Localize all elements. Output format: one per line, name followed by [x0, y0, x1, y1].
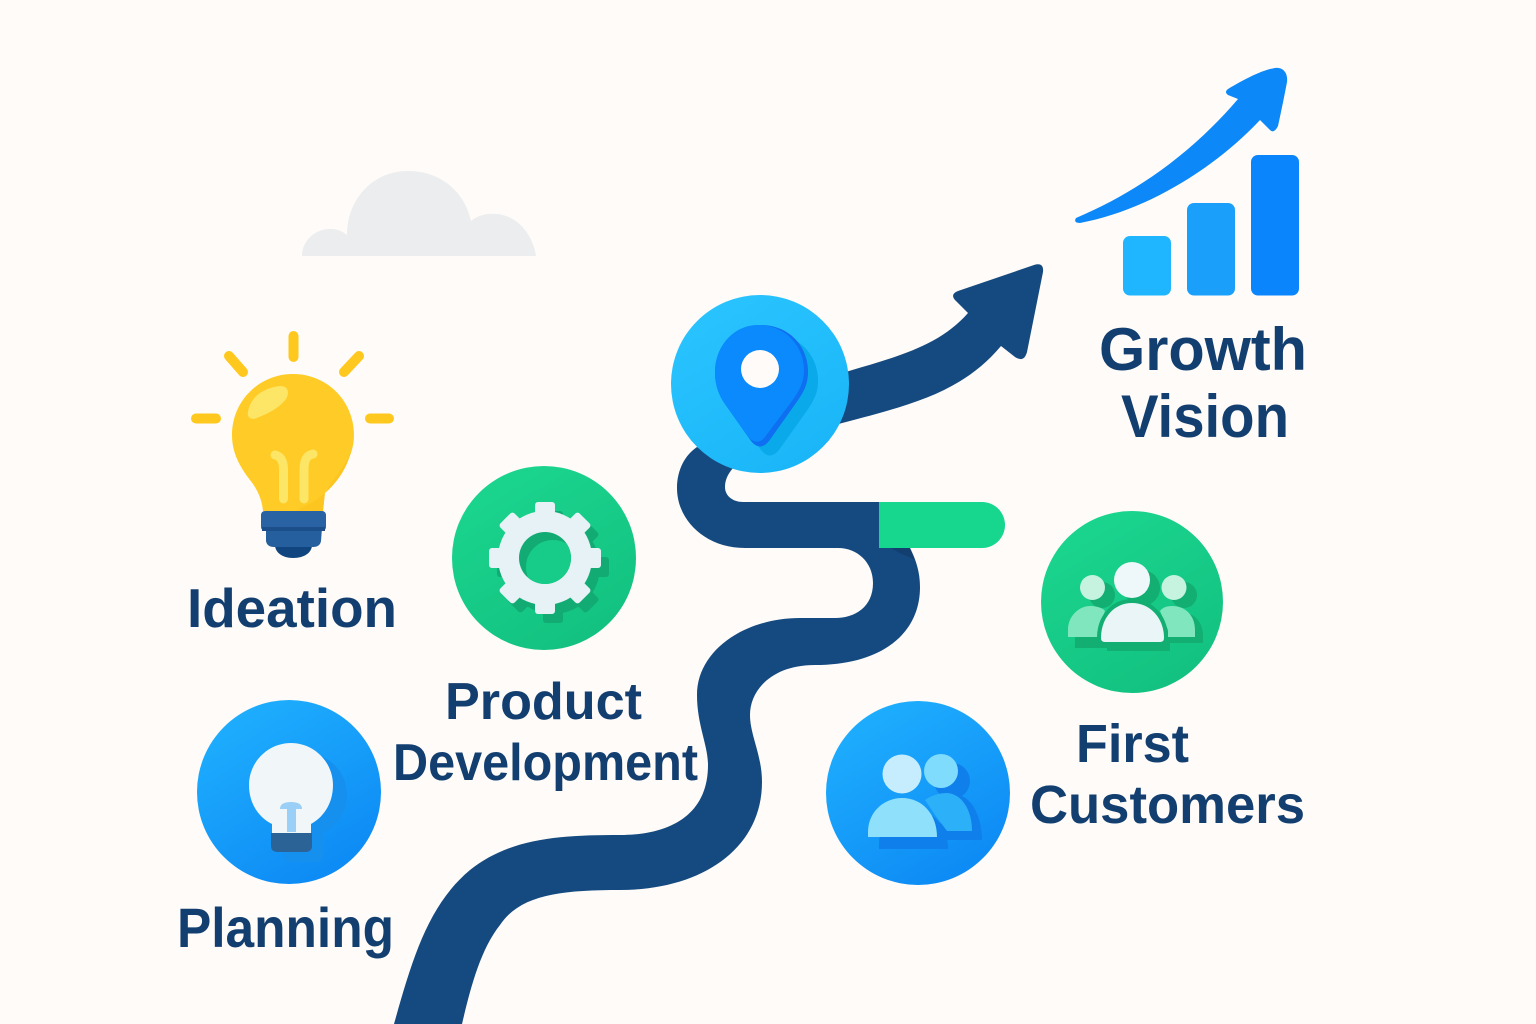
bar 3 — [1251, 155, 1299, 296]
location pin marker — [671, 295, 849, 473]
bulb filament — [280, 802, 302, 832]
road arrow to growth — [835, 264, 1043, 425]
green road segment — [879, 502, 1005, 548]
road shadow under green segment — [891, 548, 915, 560]
label: Product Development: Product — [445, 673, 642, 731]
bulb filaments — [275, 454, 313, 499]
startup journey infographic — [180, 68, 1304, 1024]
bar 1 — [1123, 236, 1171, 296]
gear body — [489, 502, 601, 614]
bulb highlight — [248, 386, 288, 419]
label: First Customers: First — [1076, 714, 1189, 774]
gear shadow — [497, 511, 609, 623]
bulb glass — [249, 743, 333, 836]
bulb base — [271, 833, 312, 852]
bulb rays — [196, 336, 389, 418]
label: Growth Vision: Vision — [1121, 383, 1289, 450]
team shadow — [1075, 570, 1203, 651]
front person — [868, 798, 937, 837]
icon: green gear circle — [452, 466, 636, 650]
bulb glass — [232, 374, 354, 511]
label: Product Development — [393, 673, 698, 792]
icon: blue bulb circle — [197, 700, 381, 884]
people shadow — [879, 763, 982, 849]
winding road path — [394, 447, 920, 1024]
growth arrow — [1075, 68, 1287, 223]
centre person — [1101, 603, 1164, 642]
icon: yellow light bulb — [196, 336, 389, 558]
icon: growth bar chart with arrow — [1075, 68, 1299, 296]
label: Product Development: Development — [393, 734, 698, 792]
label: Planning: Planning — [177, 896, 394, 959]
label: First Customers — [1030, 714, 1305, 835]
bulb base — [275, 545, 312, 558]
side people — [1068, 606, 1105, 637]
gear hole — [519, 532, 571, 584]
label: Ideation: Ideation — [187, 577, 397, 639]
icon: green team circle — [1041, 511, 1223, 693]
bulb shadow — [263, 753, 347, 862]
label: Growth Vision — [1099, 316, 1307, 450]
bar 2 — [1187, 203, 1235, 296]
back person — [925, 793, 972, 831]
icon: blue people circle — [826, 701, 1010, 885]
label: Growth Vision: Growth — [1099, 316, 1307, 383]
cloud — [302, 171, 536, 256]
label: First Customers: Customers — [1030, 775, 1305, 835]
